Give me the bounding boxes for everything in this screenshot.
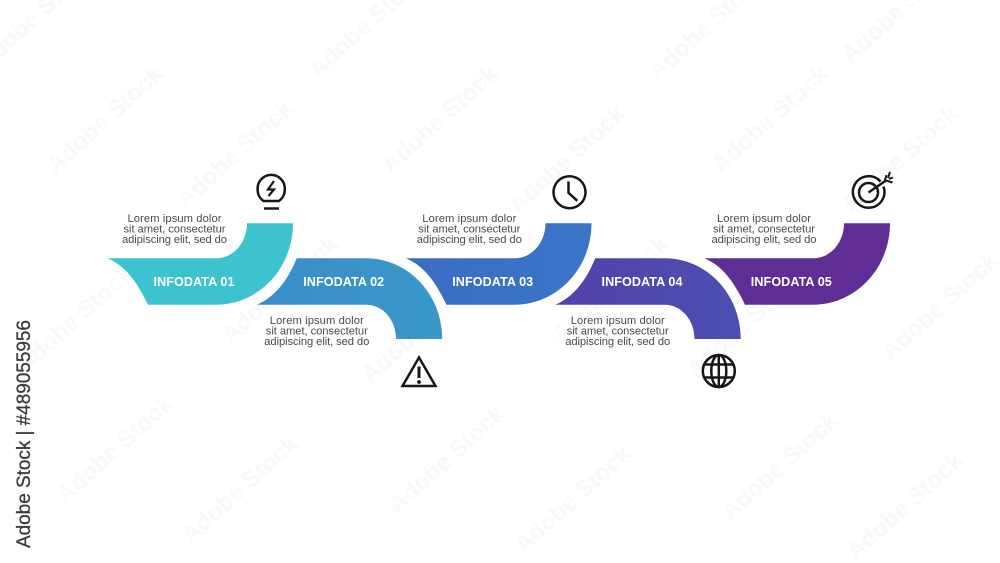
label 02: INFODATA 02 <box>303 275 384 289</box>
step 2: Infodata 02 <box>257 258 442 386</box>
watermark: faint Adobe Stock pattern: Adobe Stock <box>876 247 1000 366</box>
watermark: faint Adobe Stock pattern: Adobe Stock <box>509 440 637 559</box>
label 03: INFODATA 03 <box>452 275 533 289</box>
watermark: faint Adobe Stock pattern: Adobe Stock <box>171 95 299 214</box>
band 05 <box>704 223 890 305</box>
text block 01 <box>122 213 227 246</box>
text block 02: Lorem ipsum dolor <box>270 315 364 327</box>
watermark: faint Adobe Stock pattern: Adobe Stock <box>546 230 674 349</box>
band 02 <box>257 258 442 339</box>
watermark: faint Adobe Stock pattern: Adobe Stock <box>836 100 964 219</box>
text block 02: sit amet, consectetur <box>266 326 368 338</box>
watermark: faint Adobe Stock pattern: Adobe Stock <box>841 447 969 563</box>
step 1: Infodata 01 <box>108 175 293 305</box>
watermark: faint Adobe Stock pattern: Adobe Stock <box>706 60 834 179</box>
watermark: faint Adobe Stock pattern: Adobe Stock <box>681 265 809 384</box>
step 5: Infodata 05 <box>704 172 893 305</box>
text block 04: Lorem ipsum dolor <box>571 315 665 327</box>
watermark: faint Adobe Stock pattern: Adobe Stock <box>716 407 844 526</box>
text block 04 <box>565 315 670 348</box>
watermark: faint Adobe Stock pattern: Adobe Stock <box>216 230 344 349</box>
text block 05 <box>712 213 816 246</box>
text block 03: adipiscing elit, sed do <box>417 234 522 246</box>
icon: globe <box>703 355 735 387</box>
text block 01: Lorem ipsum dolor <box>128 213 222 225</box>
label 05: INFODATA 05 <box>751 275 832 289</box>
watermark: faint Adobe Stock pattern: Adobe Stock <box>376 60 504 179</box>
text block 05: Lorem ipsum dolor <box>717 213 811 225</box>
watermark: faint Adobe Stock pattern: Adobe Stock <box>176 430 304 549</box>
watermark: faint Adobe Stock pattern: Adobe Stock <box>51 390 179 509</box>
band 01 <box>108 223 293 305</box>
step 4: Infodata 04 <box>556 258 741 387</box>
text block 05: adipiscing elit, sed do <box>712 234 816 246</box>
watermark: faint Adobe Stock pattern: Adobe Stock <box>41 60 169 179</box>
band 04 <box>556 258 741 339</box>
band 03 <box>406 223 592 305</box>
text block 05: sit amet, consectetur <box>713 224 815 236</box>
credit: vertical stock id: Adobe Stock | #489055956 <box>14 320 35 548</box>
label 04: INFODATA 04 <box>602 275 682 289</box>
text block 02: adipiscing elit, sed do <box>264 336 369 348</box>
watermark: faint Adobe Stock pattern: Adobe Stock <box>356 270 484 389</box>
step 3: Infodata 03 <box>406 176 592 305</box>
text block 01: adipiscing elit, sed do <box>122 234 227 246</box>
text block 02 <box>264 315 369 348</box>
watermark: faint Adobe Stock pattern: Adobe Stock <box>383 400 511 519</box>
icon: light bulb <box>258 175 285 208</box>
text block 03: sit amet, consectetur <box>418 224 521 236</box>
icon: target with arrow <box>853 172 893 208</box>
text block 01: sit amet, consectetur <box>124 224 226 236</box>
text block 04: adipiscing elit, sed do <box>565 336 670 348</box>
watermark: faint Adobe Stock pattern: Adobe Stock <box>11 260 139 379</box>
label 01: INFODATA 01 <box>154 275 234 289</box>
text block 03: Lorem ipsum dolor <box>422 213 517 225</box>
watermark: faint Adobe Stock pattern: Adobe Stock <box>503 100 631 219</box>
text block 03 <box>417 213 522 246</box>
text block 04: sit amet, consectetur <box>567 326 669 338</box>
icon: clock <box>554 176 586 208</box>
icon: warning triangle <box>402 358 436 386</box>
